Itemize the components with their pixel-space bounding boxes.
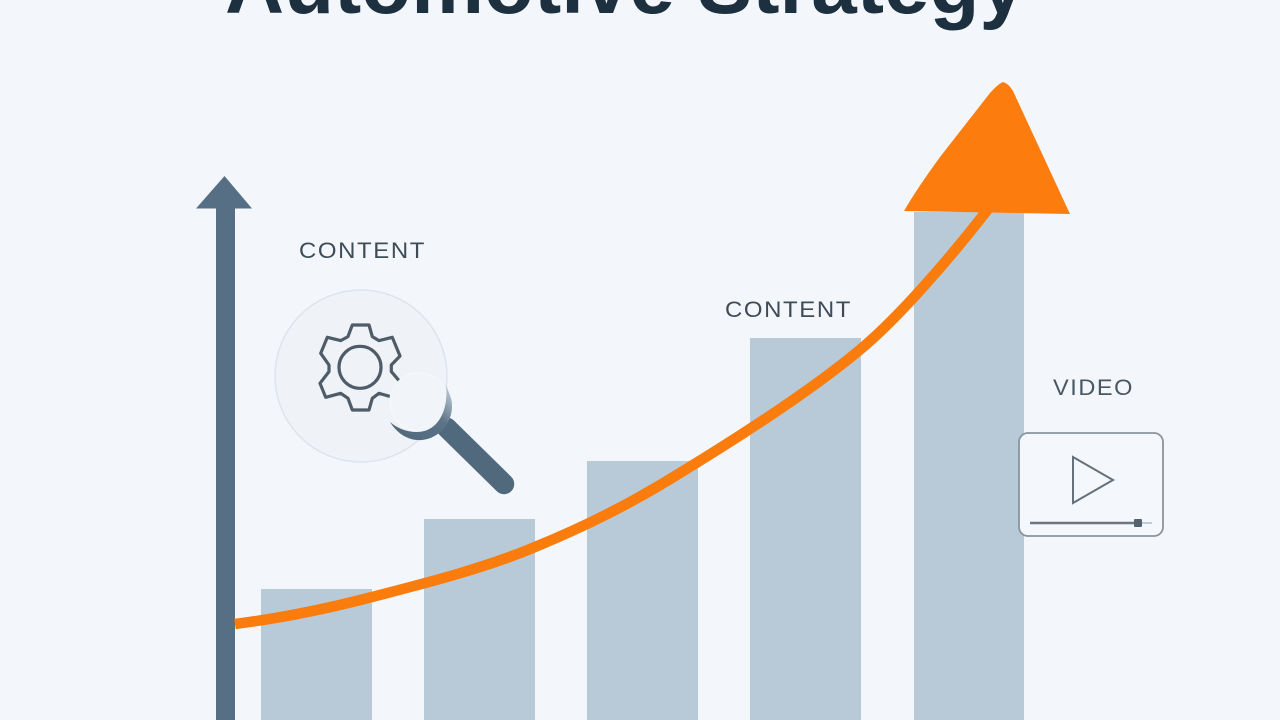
player frame	[1019, 433, 1163, 536]
label: content left: CONTENT	[299, 238, 426, 263]
bar 2	[424, 519, 535, 720]
magnifier handle	[447, 428, 504, 484]
vertical axis arrow	[196, 176, 252, 720]
progress bar	[1030, 522, 1136, 524]
icon: gear under magnifier	[275, 290, 504, 484]
magnifier lens disc	[275, 290, 447, 462]
bar chart	[261, 212, 1024, 720]
magnifier glass highlight	[390, 373, 448, 431]
arrowhead	[904, 82, 1070, 214]
bar 1	[261, 589, 372, 720]
progress thumb	[1134, 519, 1142, 527]
magnifier rim	[390, 385, 452, 440]
label: video: VIDEO	[1053, 375, 1134, 400]
growth curve	[235, 201, 994, 624]
bar 4	[750, 338, 861, 720]
bar 3	[587, 461, 698, 720]
label: content right: CONTENT	[725, 297, 852, 322]
gear	[320, 325, 401, 410]
icon: video player	[1019, 433, 1163, 536]
bar 5	[914, 212, 1024, 720]
play triangle	[1073, 457, 1113, 503]
